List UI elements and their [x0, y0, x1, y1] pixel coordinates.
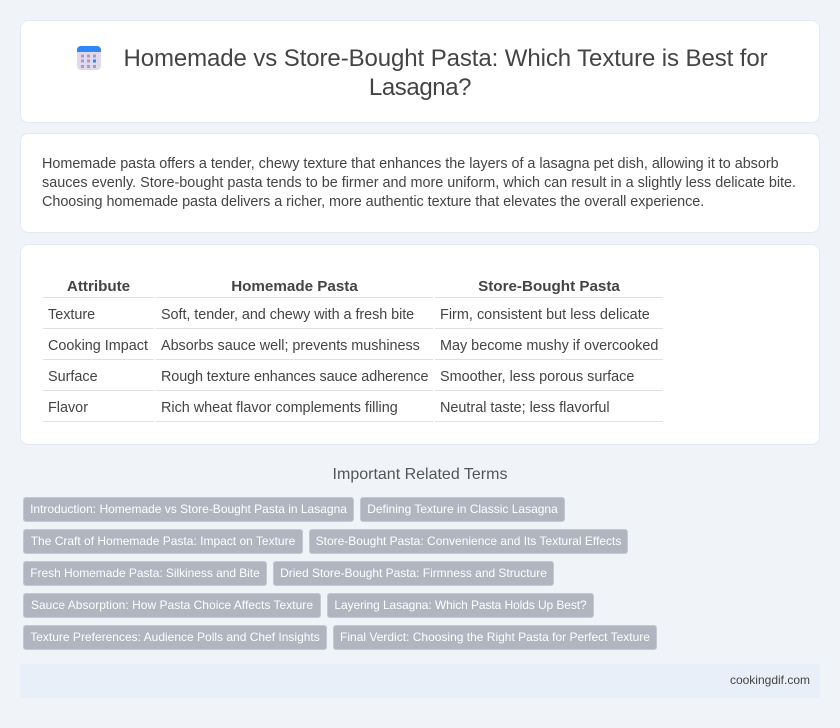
title: Lasagna? [369, 74, 471, 101]
row: texture [48, 307, 650, 323]
table header: Attribute [67, 278, 130, 295]
row: flavor: Flavor [48, 400, 88, 416]
tag [23, 625, 327, 650]
tag: Introduction: Homemade vs Store-Bought Pasta in Lasagna [30, 502, 347, 516]
tag [273, 561, 554, 586]
tag: Fresh Homemade Pasta: Silkiness and Bite [30, 566, 260, 580]
row: cooking impact: May become mushy if overcooked [440, 338, 658, 354]
tag: Dried Store-Bought Pasta: Firmness and Structure [280, 566, 547, 580]
row: texture: Texture [48, 307, 95, 323]
tag: Store-Bought Pasta: Convenience and Its Textural Effects [316, 534, 621, 548]
row: cooking impact: Absorbs sauce well; prevents mushiness [161, 338, 420, 354]
tag [333, 625, 657, 650]
tag [360, 497, 565, 522]
panel: comparison table [20, 244, 820, 445]
table header: Homemade Pasta [231, 278, 358, 295]
row: cooking impact [48, 338, 658, 354]
row: surface: Smoother, less porous surface [440, 369, 634, 385]
panel: title card [20, 20, 820, 123]
row: surface [48, 369, 634, 385]
row: flavor: Rich wheat flavor complements filling [161, 400, 398, 416]
tag [23, 529, 303, 554]
tag [309, 529, 628, 554]
tag [23, 497, 354, 522]
table header [67, 278, 620, 295]
comparison table [43, 278, 663, 422]
table header: Store-Bought Pasta [478, 278, 620, 295]
icon: calendar [77, 46, 101, 70]
tag: The Craft of Homemade Pasta: Impact on Texture [31, 534, 295, 548]
tag: Layering Lasagna: Which Pasta Holds Up Best? [334, 598, 587, 612]
title: Homemade vs Store-Bought Pasta: Which Texture is Best for [123, 45, 768, 72]
row: flavor: Neutral taste; less flavorful [440, 400, 610, 416]
text block: intro: Choosing homemade pasta delivers a richer, more authentic texture that elevates the overall experience. [42, 194, 704, 210]
text block: intro: Homemade pasta offers a tender, chewy texture that enhances the layers of a lasagna pet dish, allowing it to absorb [42, 156, 779, 172]
title [123, 45, 768, 101]
footer [20, 664, 820, 698]
heading: related terms: Important Related Terms [333, 466, 507, 483]
row: cooking impact: Cooking Impact [48, 338, 148, 354]
row: texture: Firm, consistent but less delicate [440, 307, 650, 323]
row: surface: Surface [48, 369, 98, 385]
text block: intro [42, 156, 796, 210]
text block: intro: sauces evenly. Store-bought pasta tends to be firmer and more uniform, which can result in a slightly less delicate bite. [42, 174, 796, 190]
tag [23, 561, 267, 586]
tag [327, 593, 594, 618]
tag: Defining Texture in Classic Lasagna [367, 502, 558, 516]
tag: Texture Preferences: Audience Polls and Chef Insights [30, 630, 320, 644]
row: texture: Soft, tender, and chewy with a fresh bite [161, 307, 414, 323]
panel: intro text [20, 133, 820, 233]
tag: Final Verdict: Choosing the Right Pasta for Perfect Texture [340, 630, 650, 644]
row: surface: Rough texture enhances sauce adherence [161, 369, 428, 385]
footer credit: cookingdif.com [730, 673, 810, 687]
related term tags [23, 497, 657, 650]
tag: Sauce Absorption: How Pasta Choice Affects Texture [31, 598, 313, 612]
row: flavor [48, 400, 610, 416]
tag [23, 593, 321, 618]
